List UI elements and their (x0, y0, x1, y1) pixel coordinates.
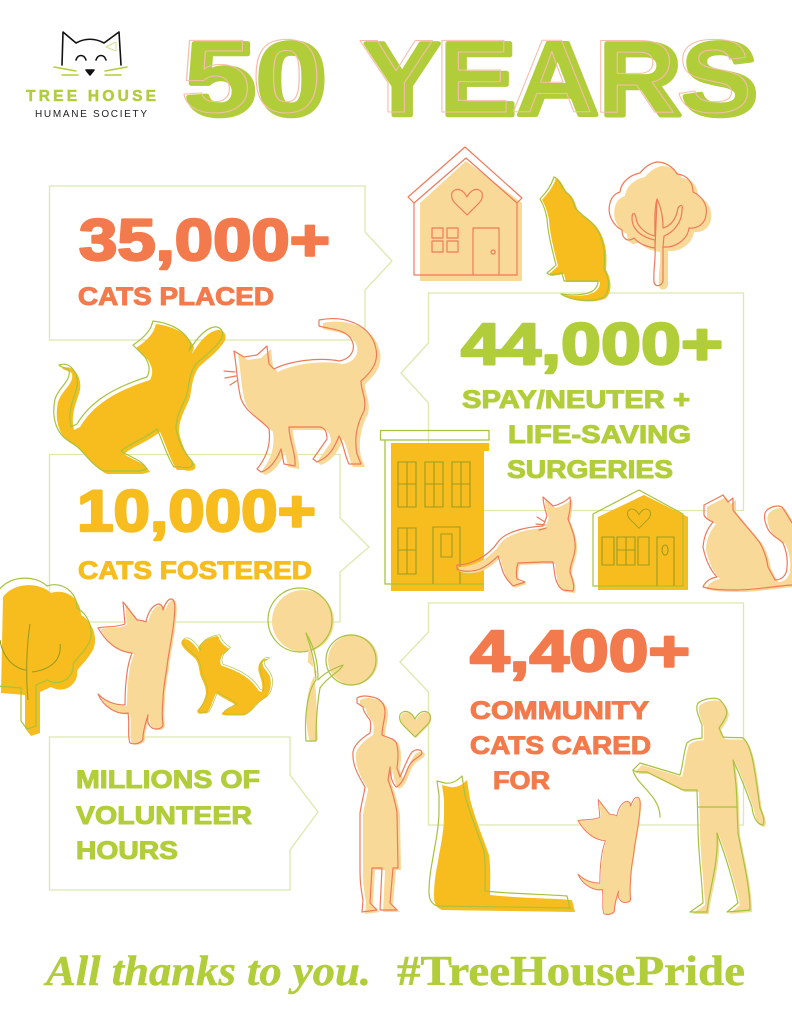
icon: apartment building (380, 430, 489, 591)
icon: walking cat beige (224, 319, 381, 475)
title: 50 YEARS (180, 19, 758, 138)
thank you text: All thanks to you. (43, 949, 371, 995)
icon: sitting cat top (540, 177, 610, 301)
icon: woman (353, 696, 425, 914)
icon: cat from behind (429, 776, 575, 912)
title fill: 50: 50 (185, 22, 327, 138)
stat number: 10,000+ (77, 479, 316, 544)
logo subtitle: HUMANE SOCIETY (35, 109, 147, 120)
callout box (50, 454, 369, 622)
stat label line 1: COMMUNITY (470, 697, 649, 725)
stat label: CATS PLACED (78, 283, 274, 311)
callout box (50, 737, 318, 890)
label line 1: MILLIONS OF (76, 766, 260, 794)
icon: cat face (54, 32, 127, 75)
stat label line 1: SPAY/NEUTER + (462, 386, 690, 414)
icon: small playing cat (181, 635, 272, 715)
panel: cats fostered (50, 454, 369, 622)
callout box (50, 186, 392, 340)
hashtag text: #TreeHousePride (397, 949, 745, 995)
icon: round tree (268, 588, 378, 742)
stat label: CATS FOSTERED (78, 557, 312, 585)
stat number: 4,400+ (470, 619, 690, 684)
title fill: YEARS: YEARS (364, 22, 758, 138)
icon: standing cat (98, 599, 177, 745)
stat label line 3: FOR (493, 767, 550, 795)
panel: cats placed (50, 186, 392, 340)
stat number: 35,000+ (79, 208, 330, 273)
panel: spay neuter surgeries (401, 293, 744, 510)
label line 3: HOURS (76, 837, 178, 865)
stat label line 2: LIFE-SAVING (508, 421, 691, 449)
stat label line 3: SURGERIES (507, 456, 673, 484)
footer tagline (43, 949, 745, 995)
stat number: 44,000+ (461, 312, 723, 377)
icon: tree left yellow (0, 578, 95, 736)
title outline: YEARS: YEARS (358, 19, 752, 135)
stat label line 2: CATS CARED (470, 732, 651, 760)
logo name: TREE HOUSE (26, 88, 156, 105)
panel: volunteer hours (50, 737, 318, 890)
icon: man with string (633, 698, 766, 914)
icon: sitting cat right (703, 495, 792, 592)
icon: tree top right (609, 162, 711, 290)
icon: standing cat with string (578, 797, 641, 915)
icon: walking cat by building (457, 497, 577, 593)
icon: heart (400, 711, 431, 738)
callout box (401, 293, 744, 510)
label line 2: VOLUNTEER (76, 802, 252, 830)
panel: community cats (400, 603, 744, 825)
callout box (400, 603, 744, 825)
icon: playing cat yellow (54, 321, 226, 474)
title outline: 50: 50 (180, 19, 322, 135)
icon: house with heart (408, 147, 522, 281)
logo: Tree House Humane Society (26, 32, 156, 120)
icon: small house yellow (593, 490, 688, 590)
